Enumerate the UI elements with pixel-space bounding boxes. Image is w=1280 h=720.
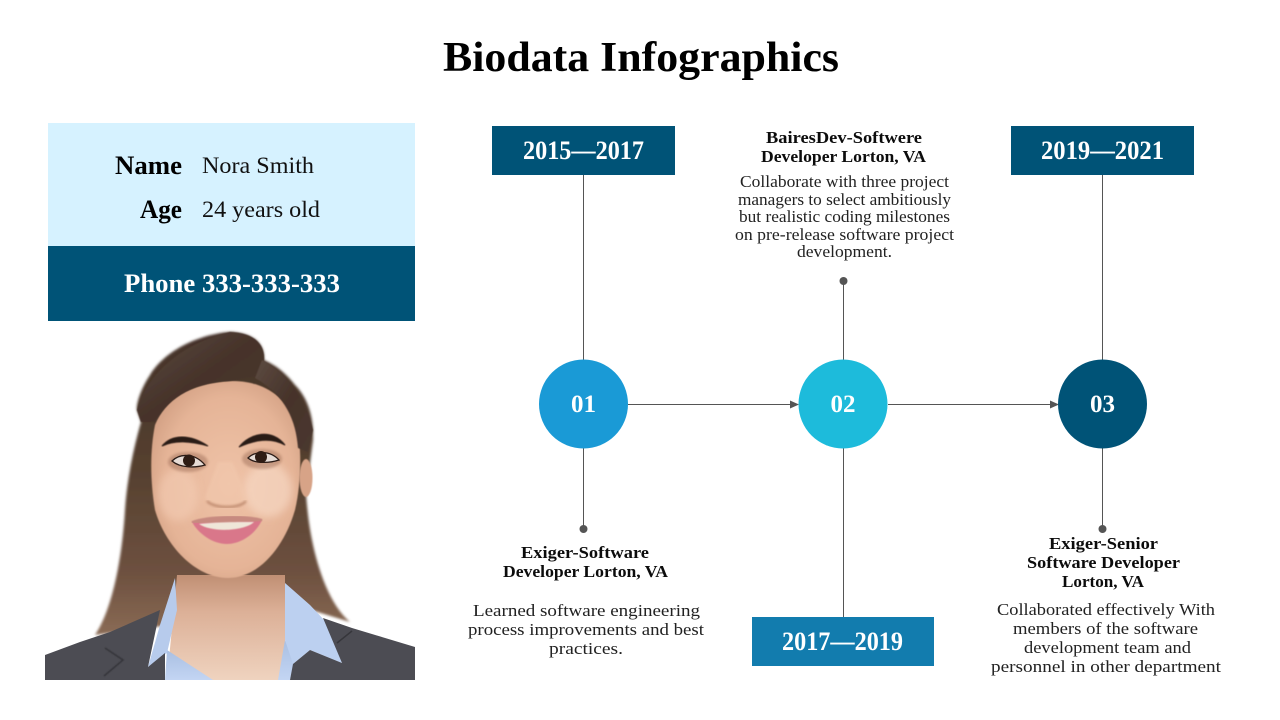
text block: BairesDev: on pre-release software project [735, 225, 954, 244]
timeline connector: 03 to 2019-2021 [1102, 175, 1104, 360]
text block: Exiger Software Developer: Learned software engineering [473, 601, 700, 620]
text block: BairesDev: managers to select ambitiously [738, 190, 952, 209]
text block: BairesDev: Collaborate with three project [740, 172, 949, 191]
panel: phone [48, 246, 415, 321]
text block: Exiger Senior Software Developer: members of the software [1013, 619, 1198, 638]
year box: 2017-2019: 2017—2019 [782, 627, 903, 656]
text block: BairesDev: Developer Lorton, VA [761, 147, 926, 166]
year box: 2015-2017 [492, 126, 675, 175]
step circle 01: 01 [571, 391, 596, 418]
panel: personal details [48, 123, 415, 246]
timeline connector: 02 to 2017-2019 [842, 448, 844, 617]
text block: BairesDev [735, 128, 954, 261]
panel: phone: Phone 333-333-333 [124, 269, 340, 298]
step circle 02 [798, 360, 888, 448]
timeline connector: 03 to Exiger Senior text [1098, 448, 1106, 533]
text block: Exiger Senior Software Developer: Collaborated effectively With [997, 600, 1216, 619]
text block: BairesDev: BairesDev-Softwere [766, 128, 922, 147]
value: age: 24 years old [202, 197, 320, 223]
arrow: 02 to 03 [888, 400, 1059, 408]
text block: Exiger Senior Software Developer: Software Developer [1027, 553, 1180, 572]
value: name: Nora Smith [202, 153, 314, 179]
year box: 2019-2021 [1011, 126, 1194, 175]
step circle 02: 02 [830, 391, 856, 418]
text block: Exiger Software Developer: Developer Lorton, VA [503, 562, 668, 581]
text block: BairesDev: development. [797, 242, 892, 261]
arrow: 01 to 02 [628, 400, 799, 408]
timeline connector: 01 to Exiger text [580, 448, 588, 533]
text block: Exiger Senior Software Developer [991, 534, 1221, 676]
text block: BairesDev: but realistic coding milestones [739, 207, 950, 226]
label: name: Name [115, 151, 182, 180]
step circle 03: 03 [1090, 391, 1115, 418]
text block: Exiger Software Developer: process improvements and best [468, 620, 704, 639]
timeline connector: 01 to 2015-2017 [582, 175, 584, 360]
text block: Exiger Senior Software Developer: personnel in other department [991, 657, 1221, 676]
text block: Exiger Senior Software Developer: Exiger-Senior [1049, 534, 1158, 553]
year box: 2019-2021: 2019—2021 [1041, 136, 1164, 165]
timeline connector: 02 to BairesDev text [840, 277, 848, 360]
label: age: Age [140, 195, 182, 224]
title: Biodata Infographics [443, 35, 839, 81]
text block: Exiger Software Developer: practices. [549, 639, 623, 658]
text block: Exiger Senior Software Developer: Lorton, VA [1062, 572, 1144, 591]
step circle 01 [539, 360, 628, 448]
text block: Exiger Software Developer [468, 543, 704, 658]
portrait photo [45, 332, 415, 680]
text block: Exiger Senior Software Developer: development team and [1024, 638, 1192, 657]
year box: 2015-2017: 2015—2017 [523, 136, 644, 165]
text block: Exiger Software Developer: Exiger-Software [521, 543, 649, 562]
step circle 03 [1058, 360, 1147, 448]
year box: 2017-2019 [752, 617, 934, 666]
